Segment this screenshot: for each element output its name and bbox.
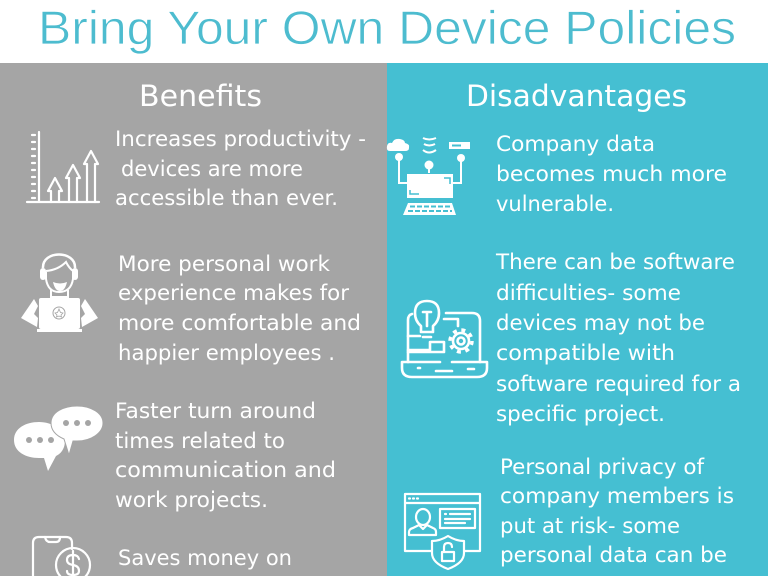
text: saves money: Saves money on xyxy=(118,546,292,570)
text: personal work experience: experience makes for xyxy=(118,281,349,305)
text: communication xyxy=(115,399,336,512)
text: personal privacy: Personal privacy of xyxy=(500,455,705,479)
text: software difficulties: difficulties- some xyxy=(496,281,681,305)
text: personal work experience: More personal work xyxy=(118,252,331,276)
icon: phone with dollar coin xyxy=(33,537,90,576)
icon: speech bubbles xyxy=(14,406,103,471)
text: productivity: Increases productivity - xyxy=(115,127,366,151)
icon: networked laptop xyxy=(387,138,470,215)
text: communication: times related to xyxy=(115,429,285,453)
text: communication: communication and xyxy=(115,458,336,482)
text: personal privacy: company members is xyxy=(500,484,734,508)
text: company data: Company data xyxy=(496,132,655,156)
text: company data: becomes much more xyxy=(496,162,727,186)
text: productivity: accessible than ever. xyxy=(115,186,338,210)
text: software difficulties: specific project. xyxy=(496,402,665,426)
text: personal work experience: happier employees . xyxy=(118,341,335,365)
text: personal privacy xyxy=(500,455,734,567)
text: communication: work projects. xyxy=(115,488,268,512)
text: software difficulties xyxy=(495,250,741,426)
heading: disadvantages: Disadvantages xyxy=(466,79,687,113)
icon: person with headset and laptop xyxy=(21,254,98,332)
icon: laptop with bulb and gear xyxy=(402,301,487,377)
text: communication: Faster turn around xyxy=(115,399,316,423)
text: software difficulties: There can be software xyxy=(495,250,735,274)
panel: benefits xyxy=(0,63,387,576)
text: personal privacy: put at risk- some xyxy=(500,514,680,538)
icon: browser window with user and shield xyxy=(405,494,480,569)
text: software difficulties: compatible with xyxy=(496,341,675,365)
text: personal privacy: personal data can be xyxy=(500,543,727,567)
heading: benefits: Benefits xyxy=(139,79,262,113)
panel: disadvantages xyxy=(387,63,768,576)
text: software difficulties: software required for a xyxy=(496,372,741,396)
text: productivity: devices are more xyxy=(121,157,303,181)
text: company data xyxy=(496,132,727,216)
text: company data: vulnerable. xyxy=(496,192,614,216)
text: personal work experience: more comfortable and xyxy=(118,311,361,335)
text: software difficulties: devices may not be xyxy=(496,311,705,335)
icon: rising arrows chart xyxy=(27,132,99,202)
text: personal work experience xyxy=(118,252,361,365)
title: Bring Your Own Device Policies xyxy=(38,1,736,54)
text: productivity xyxy=(115,127,366,210)
